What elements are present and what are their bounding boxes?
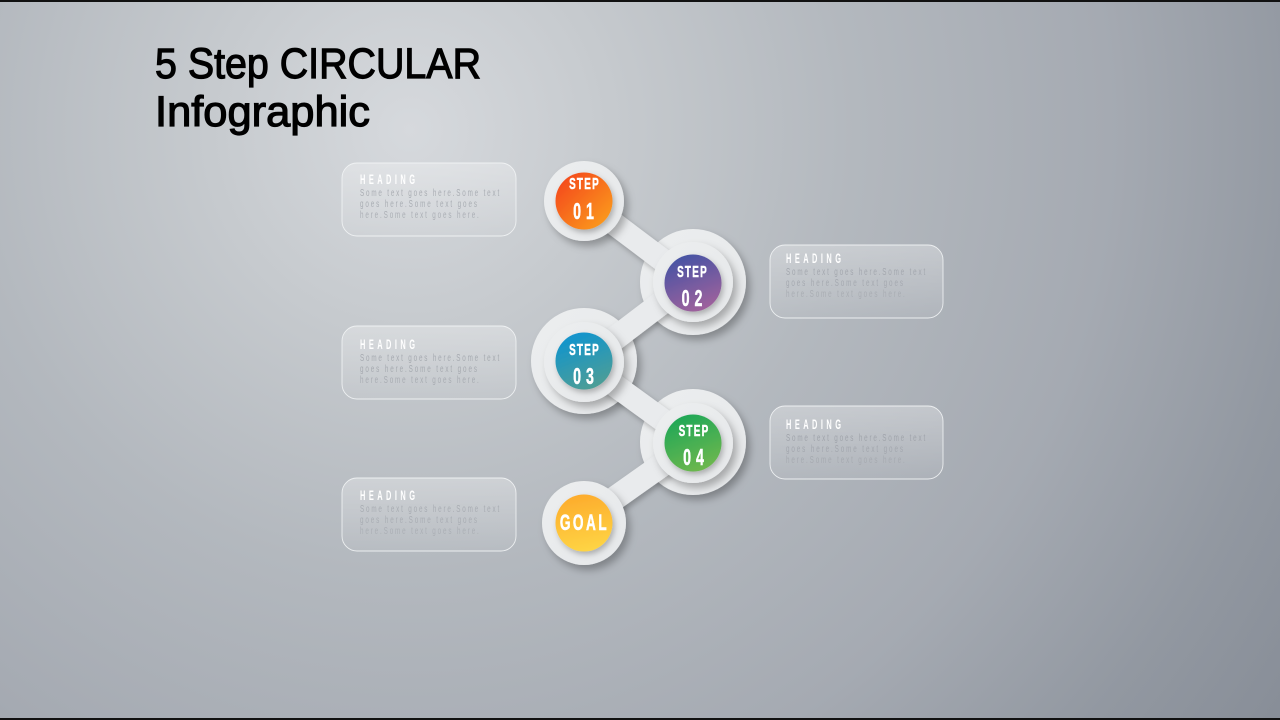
panel: text box 4: HEADING xyxy=(786,418,841,433)
panel: text box 3: Some text goes here.Some text xyxy=(360,351,500,363)
panel: text box 5: goes here.Some text goes xyxy=(360,513,477,525)
connector: step 4 to goal xyxy=(584,443,693,520)
step 03 node: 03 xyxy=(573,365,599,390)
panel: text box 3: here.Some text goes here. xyxy=(360,373,479,385)
step 03 node xyxy=(544,322,624,402)
panel: text box 5: Some text goes here.Some text xyxy=(360,502,500,514)
step 01 node: STEP xyxy=(569,175,600,193)
step 01 node: 01 xyxy=(573,200,599,225)
panel: text box 2 xyxy=(770,245,943,318)
step 04 node: 04 xyxy=(683,446,709,471)
connector: step 2 to step 3 xyxy=(584,279,693,362)
panel: text box 4: goes here.Some text goes xyxy=(786,442,903,454)
step 01 node xyxy=(544,161,624,241)
title: Infographic xyxy=(155,88,370,136)
connector: step 1 to step 2 xyxy=(584,201,693,283)
panel: text box 5 xyxy=(342,478,516,551)
panel: text box 4: here.Some text goes here. xyxy=(786,453,905,465)
step 03 node: STEP xyxy=(569,341,600,359)
step 02 node xyxy=(653,242,733,322)
panel: text box 5: here.Some text goes here. xyxy=(360,524,479,536)
panel: text box 2: Some text goes here.Some text xyxy=(786,265,926,277)
panel: text box 1: here.Some text goes here. xyxy=(360,208,479,220)
connector: step 3 to step 4 xyxy=(584,363,693,442)
panel: text box 2: goes here.Some text goes xyxy=(786,276,903,288)
title: 5 Step CIRCULAR xyxy=(155,40,481,88)
step 02 node: STEP xyxy=(677,263,708,281)
panel: text box 5: HEADING xyxy=(360,489,415,504)
panel: text box 3: goes here.Some text goes xyxy=(360,362,477,374)
goal node: GOAL xyxy=(560,510,609,535)
step 03 outer ring xyxy=(531,308,637,414)
panel: text box 3 xyxy=(342,326,516,399)
step 02 outer ring xyxy=(640,229,746,335)
panel: text box 1: Some text goes here.Some text xyxy=(360,186,500,198)
panel: text box 2: here.Some text goes here. xyxy=(786,287,905,299)
step 04 node xyxy=(653,403,733,483)
step 04 outer ring xyxy=(640,389,746,495)
step 04 node: STEP xyxy=(679,422,709,440)
panel: text box 3: HEADING xyxy=(360,338,415,353)
panel: text box 2: HEADING xyxy=(786,252,841,267)
panel: text box 1: goes here.Some text goes xyxy=(360,197,477,209)
panel: text box 1: HEADING xyxy=(360,173,415,188)
goal node xyxy=(542,481,626,565)
panel: text box 1 xyxy=(342,163,516,236)
panel: text box 4 xyxy=(770,406,943,479)
panel: text box 4: Some text goes here.Some text xyxy=(786,431,926,443)
title xyxy=(155,40,481,136)
step 02 node: 02 xyxy=(682,287,707,312)
